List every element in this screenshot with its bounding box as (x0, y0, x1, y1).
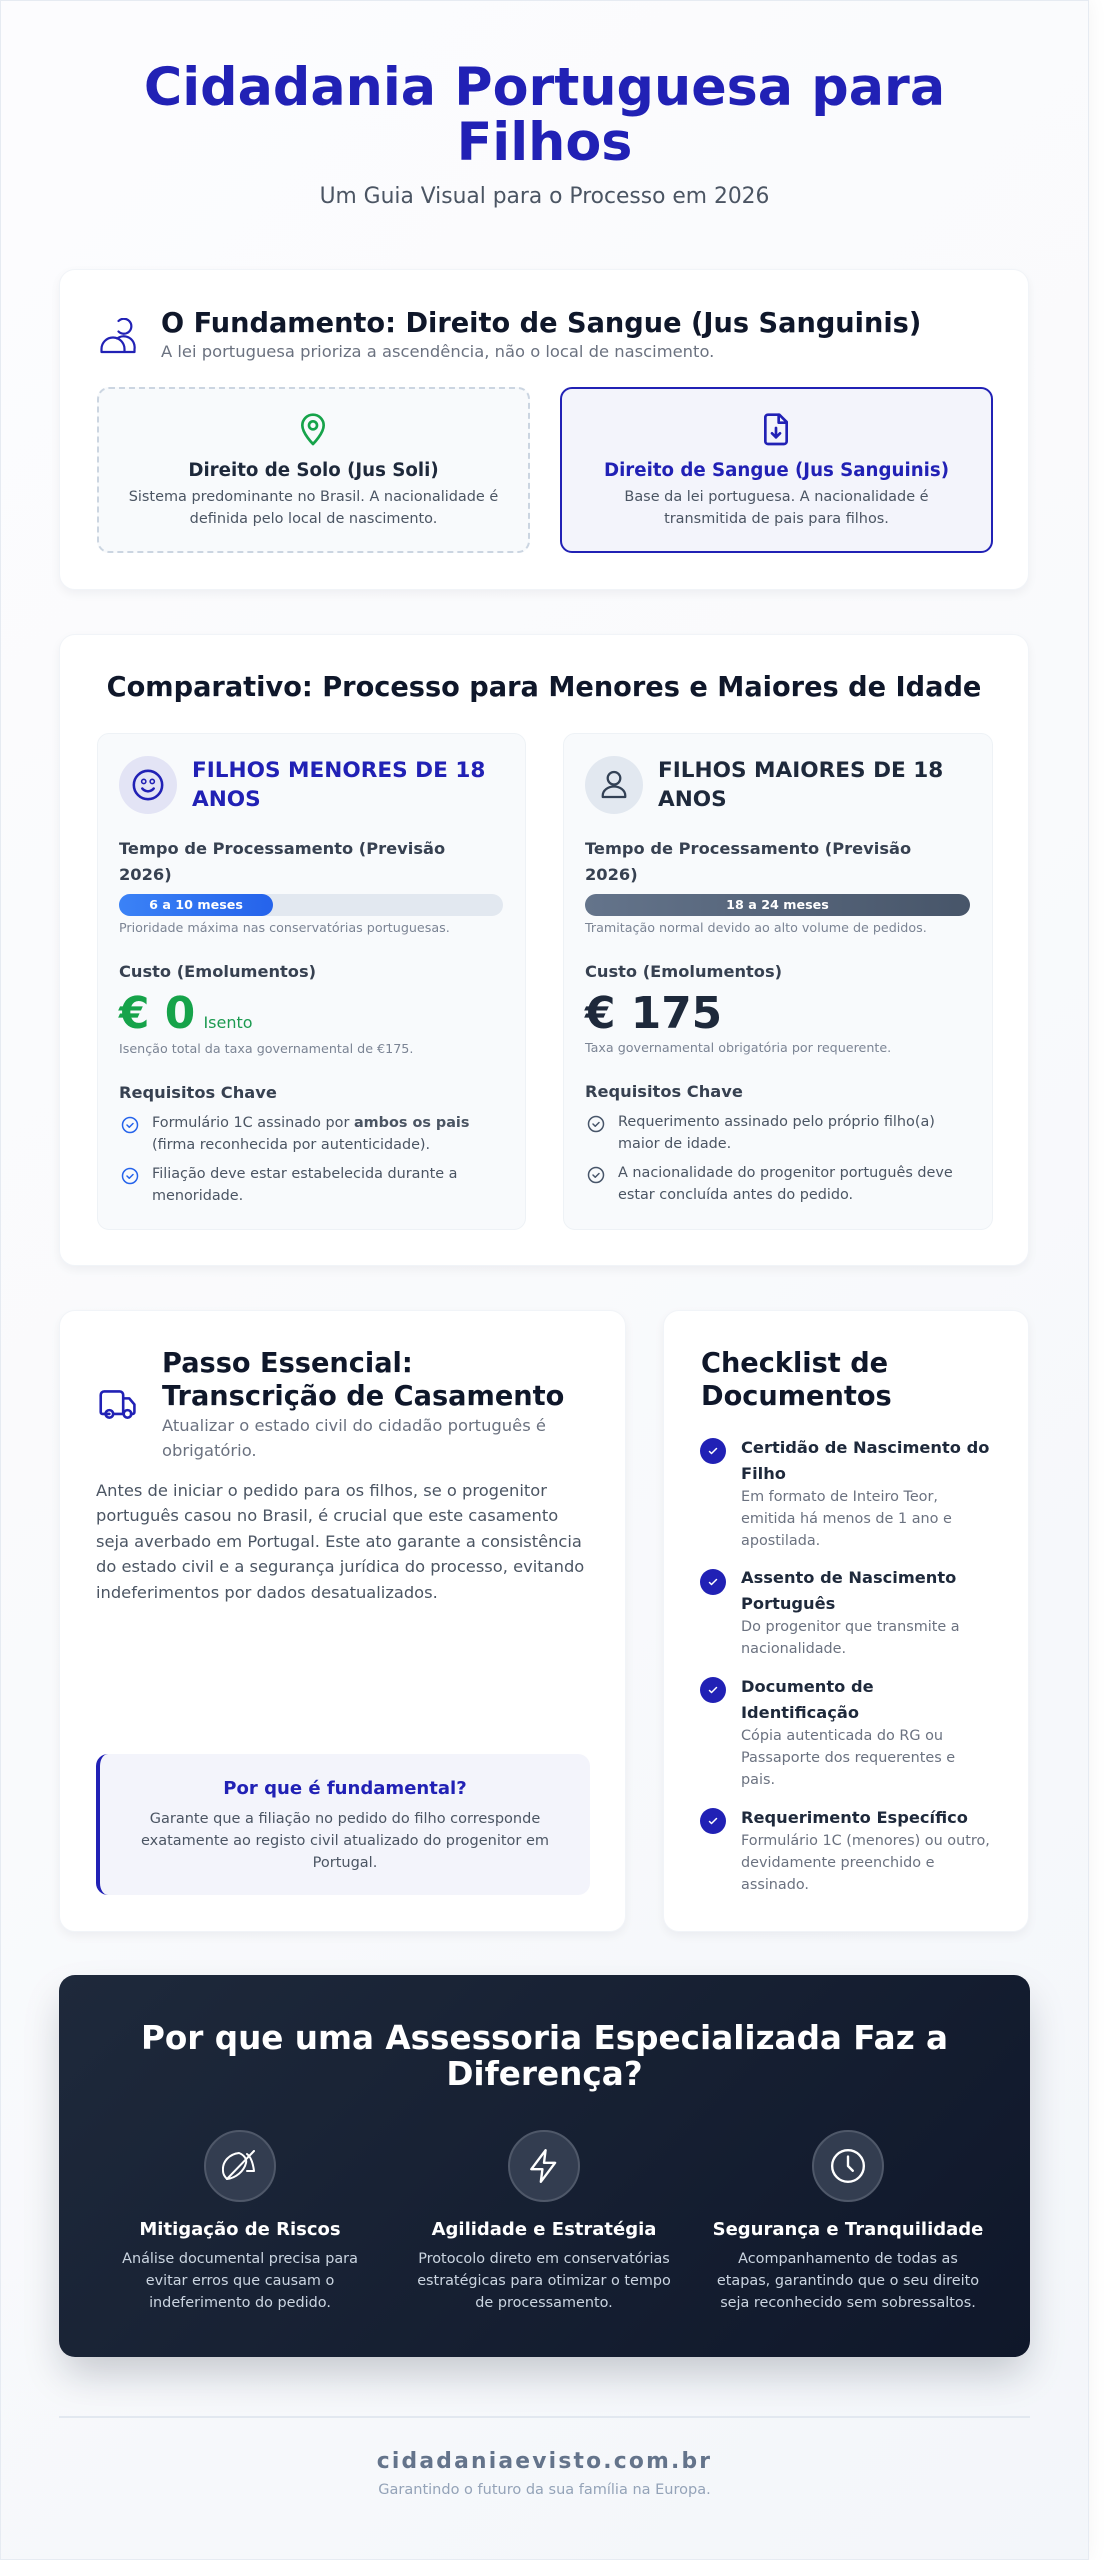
menores cost note: Isenção total da taxa governamental de €175. (119, 1041, 413, 1056)
maiores time note: Tramitação normal devido ao alto volume de pedidos. (585, 920, 927, 935)
seguranca text (703, 2249, 993, 2314)
column: maiores (563, 733, 993, 1230)
item 4 text: Formulário 1C (menores) ou outro, (741, 1833, 990, 1849)
mitigacao text: Análise documental precisa para (122, 2251, 358, 2267)
item 3 text (741, 1728, 955, 1788)
panel: checklist (663, 1310, 1029, 1932)
heading: assessoria: Diferença? (446, 2055, 643, 2093)
icon: check 1 (122, 1116, 138, 1134)
seguranca title: Segurança e Tranquilidade (713, 2219, 983, 2240)
transcricao body (96, 1481, 584, 1602)
title: Cidadania Portuguesa para (144, 57, 945, 118)
agilidade text: de processamento. (475, 2295, 613, 2311)
jus sanguinis text: transmitida de pais para filhos. (664, 511, 889, 527)
requirement 4: A nacionalidade do progenitor português deve (618, 1165, 953, 1181)
requirement 4 (618, 1165, 953, 1203)
seguranca text: etapas, garantindo que o seu direito (717, 2273, 979, 2289)
callout: por que e fundamental (96, 1754, 590, 1895)
icon: clock (812, 2130, 884, 2202)
maiores time label (585, 839, 911, 884)
menores heading (192, 758, 485, 812)
icon: check 3 (588, 1116, 604, 1132)
column: menores (97, 733, 526, 1230)
requirement 1: Formulário 1C assinado por ambos os pais (152, 1115, 469, 1131)
heading: checklist (701, 1348, 892, 1412)
maiores time label: 2026) (585, 865, 638, 884)
mitigacao text: indeferimento do pedido. (149, 2295, 331, 2311)
heading: transcricao: Transcrição de Casamento (162, 1381, 564, 1412)
icon: file down (764, 413, 788, 446)
icon: check 4 (588, 1166, 604, 1184)
requirement 2: Filiação deve estar estabelecida durante a (152, 1166, 457, 1182)
checklist item 4 (700, 1808, 990, 1893)
requirement 2: menoridade. (152, 1188, 243, 1204)
menores requirements label: Requisitos Chave (119, 1083, 277, 1102)
agilidade title: Agilidade e Estratégia (432, 2219, 656, 2240)
time bar: 18 a 24 meses: 18 a 24 meses (726, 897, 829, 912)
item 1 text: apostilada. (741, 1533, 820, 1549)
fundamento subtitle: A lei portuguesa prioriza a ascendência, não o local de nascimento. (161, 342, 714, 361)
maiores heading: FILHOS MAIORES DE 18 (658, 758, 943, 783)
seguranca text: Acompanhamento de todas as (738, 2251, 958, 2267)
benefit: mitigacao (122, 2130, 358, 2311)
agilidade text: estratégicas para otimizar o tempo (417, 2273, 671, 2289)
transcricao subtitle: Atualizar o estado civil do cidadão português é (162, 1416, 546, 1435)
item 4 title: Requerimento Específico (741, 1808, 968, 1827)
requirement 4: estar concluída antes do pedido. (618, 1187, 853, 1203)
item 3 title: Documento de (741, 1677, 874, 1696)
icon: smile (119, 756, 177, 814)
transcricao body: Antes de iniciar o pedido para os filhos, se o progenitor (96, 1481, 547, 1500)
item 2 title (741, 1568, 956, 1613)
menores cost label: Custo (Emolumentos) (119, 962, 316, 981)
item 1 title: Certidão de Nascimento do (741, 1438, 989, 1457)
maiores requirements label: Requisitos Chave (585, 1082, 743, 1101)
heading: fundamento: O Fundamento: Direito de Sangue (Jus Sanguinis) (161, 308, 921, 339)
title (144, 57, 945, 173)
jus soli text: Sistema predominante no Brasil. A nacionalidade é (129, 489, 498, 505)
time bar: 6 a 10 meses (119, 894, 503, 916)
item 3 title (741, 1677, 874, 1722)
jus soli text (129, 489, 498, 527)
jus soli title: Direito de Solo (Jus Soli) (188, 460, 439, 481)
requirement 2 (152, 1166, 457, 1204)
heading: assessoria (141, 2019, 948, 2093)
jus sanguinis title: Direito de Sangue (Jus Sanguinis) (604, 460, 949, 481)
item 3 text: Passaporte dos requerentes e (741, 1750, 955, 1766)
callout text: Garante que a filiação no pedido do filho corresponde (150, 1811, 540, 1827)
icon: check 2 (122, 1168, 138, 1184)
icon: user (585, 756, 643, 814)
seguranca text: seja reconhecido sem sobressaltos. (720, 2295, 976, 2311)
requirement 3 (618, 1114, 935, 1152)
icon: truck (99, 1390, 136, 1419)
subtitle: Um Guia Visual para o Processo em 2026 (320, 184, 769, 209)
requirement 1 (152, 1115, 469, 1153)
jus sanguinis text: Base da lei portuguesa. A nacionalidade é (624, 489, 929, 505)
callout text: exatamente ao registo civil atualizado do progenitor em (141, 1833, 549, 1849)
time bar: 18 a 24 meses (585, 894, 970, 916)
item 2 text: Do progenitor que transmite a (741, 1619, 960, 1635)
item 2 text: nacionalidade. (741, 1641, 846, 1657)
footer tagline: Garantindo o futuro da sua família na Europa. (378, 2482, 711, 2498)
item 1 title (741, 1438, 989, 1483)
heading: assessoria: Por que uma Assessoria Especializada Faz a (141, 2019, 948, 2057)
menores time label: Tempo de Processamento (Previsão (119, 839, 445, 858)
maiores cost label: Custo (Emolumentos) (585, 962, 782, 981)
icon: zap (508, 2130, 580, 2202)
jus sanguinis text (624, 489, 929, 527)
transcricao body: seja averbado em Portugal. Este ato garante a consistência (96, 1532, 582, 1551)
checklist item 3 (700, 1677, 955, 1788)
footer brand: cidadaniaevisto.com.br (377, 2449, 712, 2474)
panel: comparativo (59, 634, 1029, 1266)
time bar fill: 6 a 10 meses (149, 897, 243, 912)
mitigacao title: Mitigação de Riscos (139, 2219, 341, 2240)
icon: check (700, 1569, 726, 1595)
item 2 title: Português (741, 1594, 835, 1613)
item 4 text (741, 1833, 990, 1893)
maiores time label: Tempo de Processamento (Previsão (585, 839, 911, 858)
maiores heading: ANOS (658, 787, 727, 812)
item 2 text (741, 1619, 960, 1657)
icon: check (700, 1677, 726, 1703)
icon: check (700, 1438, 726, 1464)
checklist item 1 (700, 1438, 989, 1549)
icon: leaf shield (204, 2130, 276, 2202)
menores heading: FILHOS MENORES DE 18 (192, 758, 485, 783)
requirement 3: Requerimento assinado pelo próprio filho(a) (618, 1114, 935, 1130)
item 1 text: Em formato de Inteiro Teor, (741, 1489, 938, 1505)
maiores cost note: Taxa governamental obrigatória por requerente. (585, 1040, 891, 1055)
panel: fundamento (59, 269, 1029, 590)
menores heading: ANOS (192, 787, 261, 812)
item 4 text: assinado. (741, 1877, 809, 1893)
title: Filhos (457, 112, 632, 173)
maiores cost value: € 175 (585, 988, 722, 1039)
heading: checklist: Documentos (701, 1381, 892, 1412)
icon: check (700, 1808, 726, 1834)
maiores heading (658, 758, 943, 812)
checklist item 2 (700, 1568, 960, 1657)
item 1 text: emitida há menos de 1 ano e (741, 1511, 952, 1527)
menores cost value: € 0 Isento (119, 988, 253, 1039)
transcricao body: indeferimentos por dados desatualizados. (96, 1583, 438, 1602)
panel: assessoria (59, 1975, 1030, 2357)
mitigacao text: evitar erros que causam o (146, 2273, 334, 2289)
heading: transcricao (162, 1348, 564, 1412)
item 2 title: Assento de Nascimento (741, 1568, 956, 1587)
callout title: Por que é fundamental? (223, 1778, 467, 1799)
transcricao subtitle (162, 1416, 546, 1460)
heading: transcricao: Passo Essencial: (162, 1348, 413, 1379)
box: jus sanguinis (560, 387, 993, 553)
icon: users (100, 318, 136, 354)
heading: checklist: Checklist de (701, 1348, 888, 1379)
item 3 title: Identificação (741, 1703, 859, 1722)
callout text (141, 1811, 549, 1871)
panel: transcricao de casamento (59, 1310, 626, 1932)
jus soli text: definida pelo local de nascimento. (190, 511, 437, 527)
item 3 text: Cópia autenticada do RG ou (741, 1728, 943, 1744)
agilidade text (399, 2249, 689, 2314)
box: jus soli (97, 387, 530, 553)
transcricao body: do estado civil e a segurança jurídica do processo, evitando (96, 1557, 584, 1576)
heading: comparativo: Comparativo: Processo para Menores e Maiores de Idade (107, 672, 981, 703)
menores time label (119, 839, 445, 884)
item 1 text (741, 1489, 952, 1549)
transcricao subtitle: obrigatório. (162, 1441, 257, 1460)
mitigacao text (122, 2251, 358, 2311)
benefit: agilidade (417, 2130, 671, 2311)
menores time label: 2026) (119, 865, 172, 884)
transcricao body: português casou no Brasil, é crucial que este casamento (96, 1506, 558, 1525)
requirement 1: (firma reconhecida por autenticidade). (152, 1137, 430, 1153)
time bar fill (119, 894, 273, 916)
menores time note: Prioridade máxima nas conservatórias portuguesas. (119, 920, 450, 935)
requirement 3: maior de idade. (618, 1136, 731, 1152)
item 3 text: pais. (741, 1772, 775, 1788)
item 1 title: Filho (741, 1464, 786, 1483)
footer (59, 2416, 1030, 2506)
agilidade text: Protocolo direto em conservatórias (418, 2251, 670, 2267)
icon: map pin (301, 413, 325, 446)
benefit: seguranca (703, 2130, 993, 2320)
item 4 text: devidamente preenchido e (741, 1855, 934, 1871)
callout text: Portugal. (313, 1855, 377, 1871)
